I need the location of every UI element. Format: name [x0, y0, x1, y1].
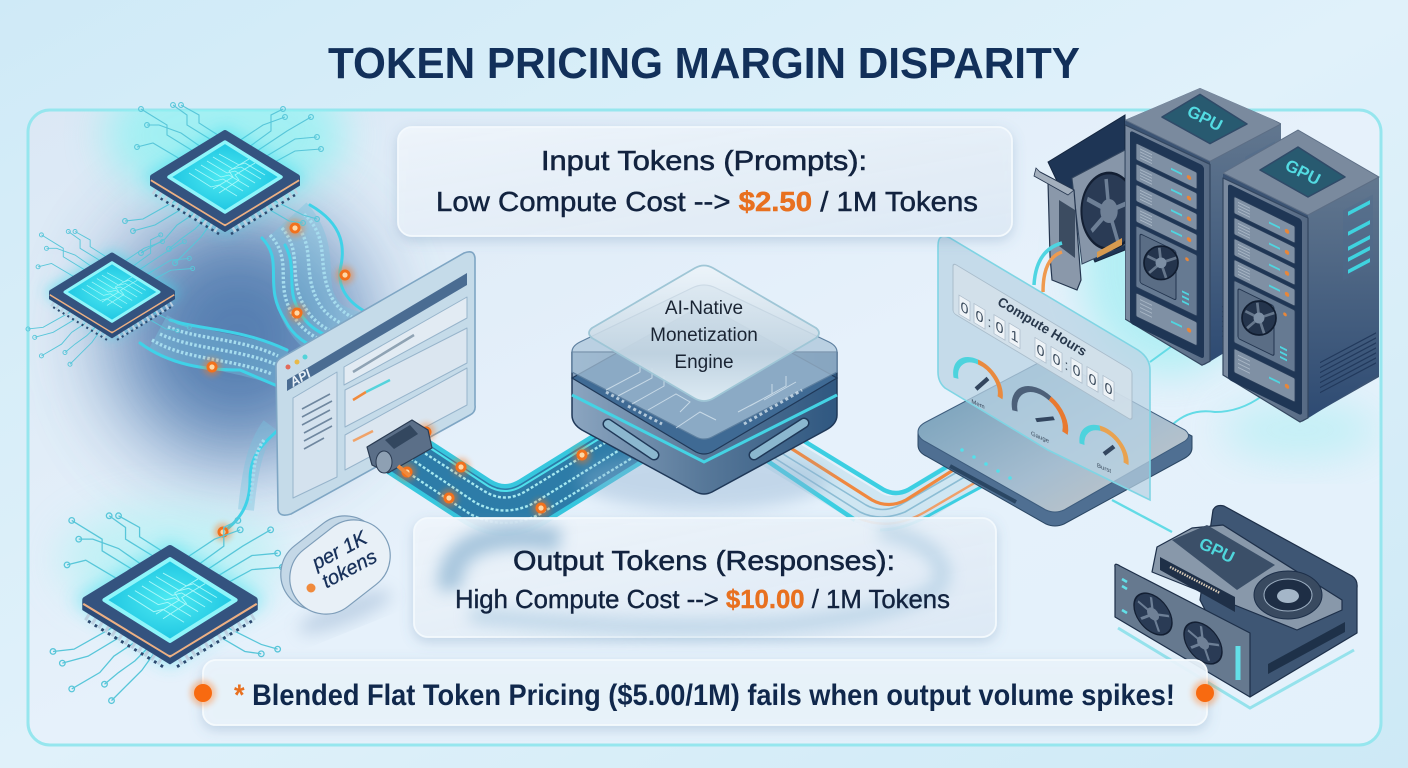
gpu back plate — [1200, 506, 1357, 697]
engine circuit — [606, 362, 802, 428]
timer digits: 0 — [976, 307, 983, 327]
engine label — [650, 298, 758, 373]
timer digits — [961, 293, 1112, 405]
right ribbon from engine to dashboard — [757, 430, 1005, 530]
gpu front fans — [1134, 587, 1172, 641]
gpu heatsink plate — [1172, 525, 1275, 590]
engine cyan seam — [572, 395, 837, 462]
right slot — [754, 423, 804, 455]
pill text: tokens — [318, 546, 381, 593]
gpu front face — [1115, 564, 1250, 697]
pill text: per 1K — [308, 526, 372, 575]
API title bar — [287, 273, 467, 391]
gpu label: GPU — [1196, 534, 1238, 567]
sidebar — [293, 372, 337, 498]
timer digits: : — [1065, 357, 1068, 375]
timer digits: 0 — [1073, 361, 1080, 381]
dashboard base — [918, 360, 1192, 526]
gpu card top — [1152, 525, 1342, 630]
gauge one: Mem — [971, 398, 985, 411]
engine body — [572, 352, 837, 494]
warning text: * Blended Flat Token Pricing ($5.00/1M) fails when output volume spikes! — [234, 679, 1175, 712]
server rack right — [1223, 130, 1379, 422]
warning footnote — [190, 660, 1218, 725]
server rack left — [1125, 78, 1281, 365]
left ribbon connecting API to engine — [392, 423, 642, 523]
engine glass layer — [572, 285, 837, 439]
rack right GPU label: GPU — [1282, 156, 1323, 189]
gpu shadow outline — [1118, 628, 1354, 708]
warning dot right — [1192, 680, 1218, 706]
chip top — [123, 103, 323, 265]
GPU card cables — [1034, 243, 1062, 292]
engine label: Engine — [674, 352, 734, 373]
glass plate — [589, 266, 819, 401]
left slot inner — [608, 424, 654, 455]
per 1K tokens pill — [266, 501, 405, 642]
input price line: Low Compute Cost --> $2.50 / 1M Tokens — [436, 186, 978, 217]
output price line: High Compute Cost --> $10.00 / 1M Tokens — [455, 584, 950, 614]
API connector plug — [367, 420, 432, 476]
engine label: Monetization — [650, 325, 758, 346]
content row two — [345, 328, 467, 427]
timer digits: 0 — [1037, 341, 1044, 361]
rack left GPU label: GPU — [1184, 102, 1225, 135]
gpu right slot — [1268, 622, 1345, 674]
timer digits: 1 — [1011, 326, 1018, 347]
warning dot left — [190, 680, 216, 706]
content row three — [345, 368, 467, 470]
right slot inner — [754, 423, 804, 455]
timer strip — [953, 263, 1132, 420]
stream node — [286, 219, 304, 237]
timer digits: 0 — [996, 318, 1003, 338]
gpu edge connector block — [1160, 557, 1235, 612]
gauge one — [956, 352, 1000, 418]
timer digits: 0 — [1053, 350, 1060, 370]
left slot — [608, 424, 654, 455]
compute hours glass panel — [938, 236, 1150, 500]
output swirl — [450, 532, 943, 627]
content accents — [353, 335, 414, 441]
monetization engine — [572, 266, 837, 510]
chip bottom — [50, 513, 285, 703]
gpu fan on top — [1254, 571, 1322, 619]
stream nodes — [203, 266, 354, 541]
timer digits: 0 — [1089, 370, 1096, 390]
gpu connector pins — [1170, 567, 1220, 593]
API window — [276, 252, 475, 515]
timer digits: 0 — [1105, 379, 1112, 399]
GPU card bottom right — [1115, 506, 1357, 708]
engine shadow — [579, 450, 829, 510]
output heading: Output Tokens (Responses): — [513, 545, 895, 576]
ribbon nodes — [398, 423, 591, 517]
title: TOKEN PRICING MARGIN DISPARITY — [328, 39, 1080, 88]
engine label: AI-Native — [665, 298, 743, 319]
input tokens box — [398, 127, 1012, 236]
timer digits: 0 — [961, 299, 968, 319]
output tokens box — [414, 518, 996, 637]
timer digits: : — [988, 314, 991, 332]
pill dot — [306, 584, 316, 592]
window controls — [286, 354, 308, 370]
content row one — [344, 297, 467, 385]
data streams from chips to API window — [140, 205, 372, 532]
API label: API — [286, 366, 314, 390]
engine dark layer — [572, 308, 837, 454]
gauge two: Gauge — [1031, 430, 1049, 445]
gpu lights — [1122, 579, 1238, 680]
GPU card behind rack — [1034, 115, 1137, 292]
base port — [950, 466, 1016, 502]
input heading: Input Tokens (Prompts): — [541, 145, 867, 176]
rack connections — [1112, 346, 1262, 532]
compute hours label: Compute Hours — [995, 294, 1090, 359]
base status lights — [960, 448, 1012, 480]
gauge three: Burst — [1097, 462, 1111, 475]
pill text — [308, 526, 382, 593]
gauge two — [1014, 380, 1065, 452]
gauge three — [1082, 420, 1126, 482]
chip middle — [26, 230, 195, 366]
sidebar lines — [302, 394, 332, 449]
